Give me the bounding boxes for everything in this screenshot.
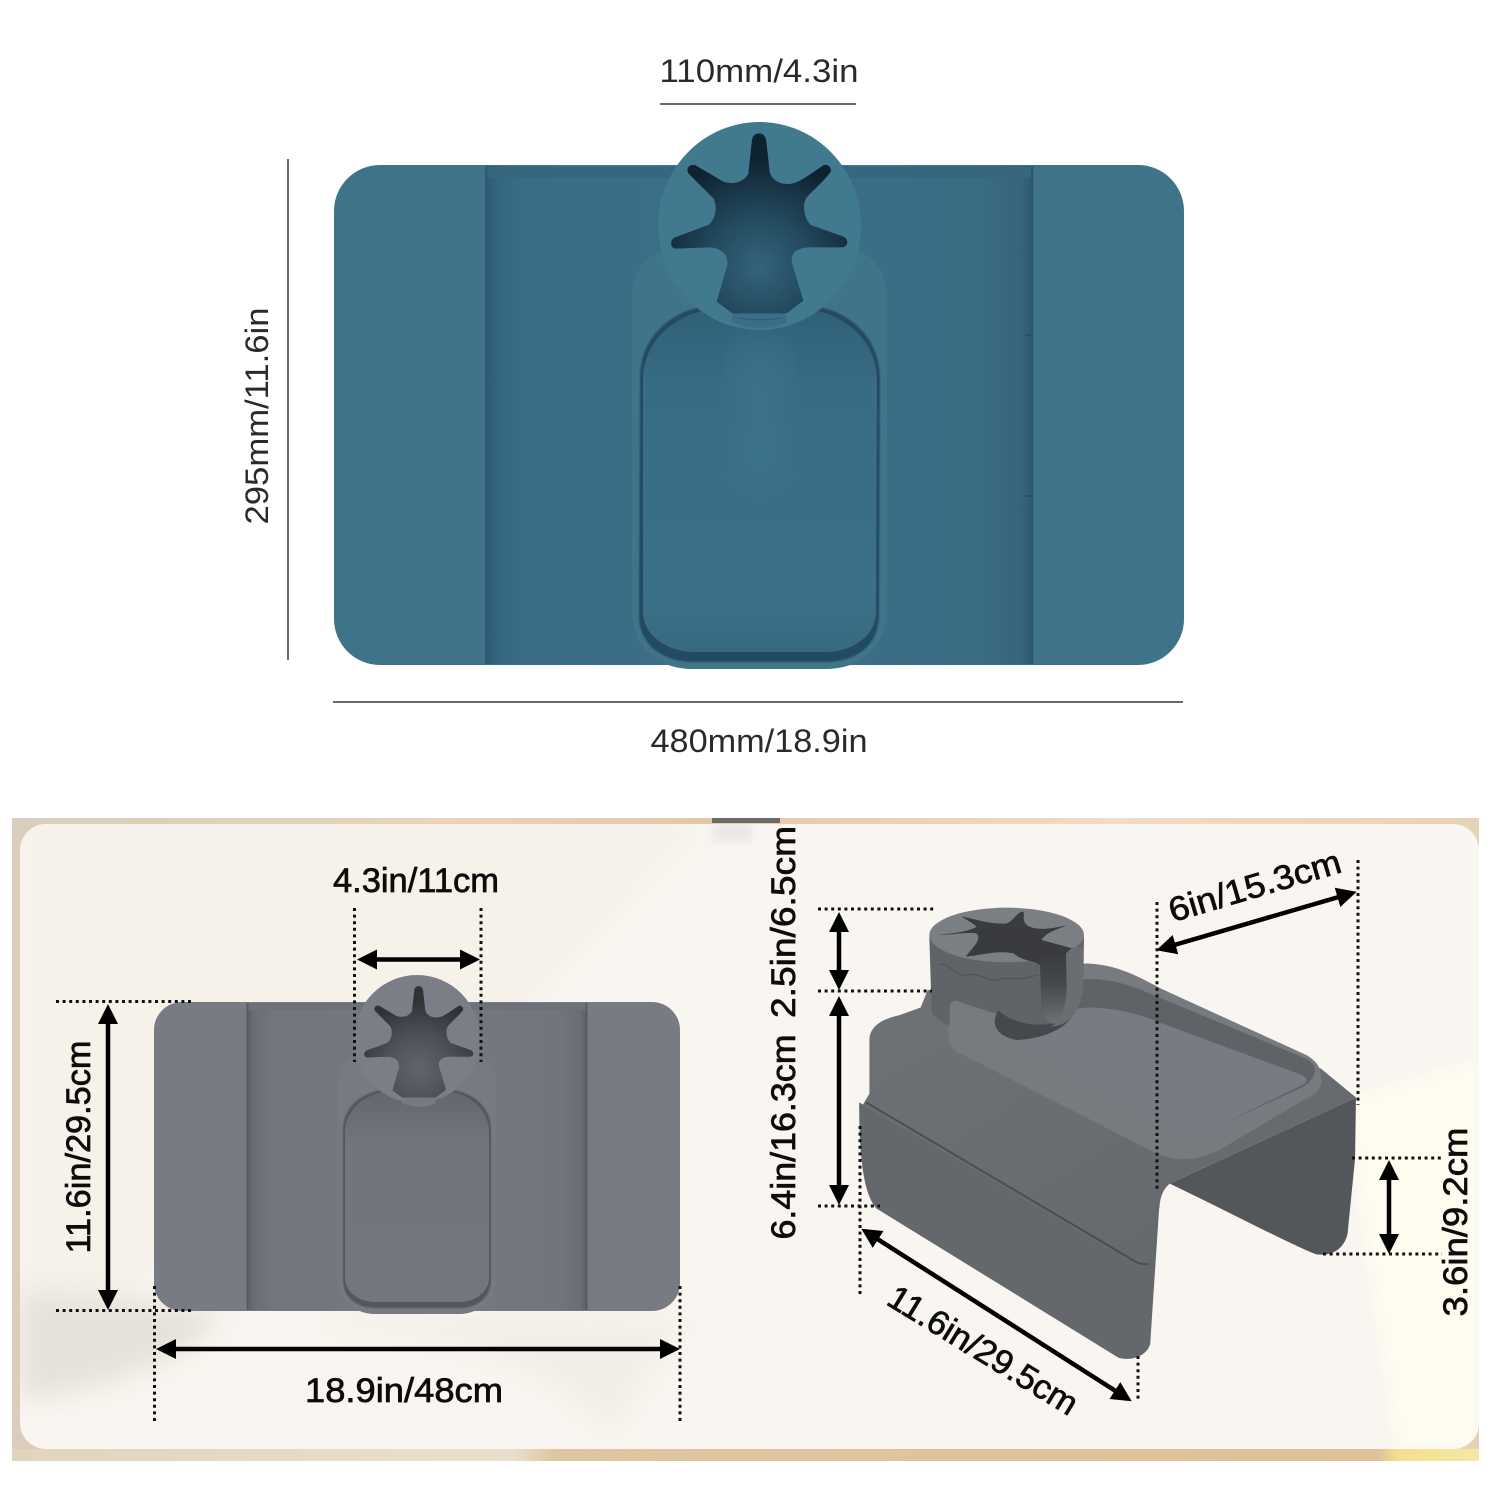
slot interior — [1040, 953, 1068, 1024]
front pocket — [859, 1102, 1159, 1359]
3D view dimension lines — [818, 860, 1442, 1402]
top dimension: total width: 480mm/18.9in — [650, 723, 868, 759]
cylinder wavy seam — [938, 964, 1037, 980]
label: cup holder width: 4.3in/11cm — [333, 862, 499, 900]
grey cup holder — [354, 975, 480, 1107]
arrow: tray width — [1164, 894, 1349, 948]
grey tray well — [343, 1089, 491, 1308]
label: tray height: 6.4in/16.3cm — [765, 1035, 803, 1239]
grey tray, 3D perspective view — [859, 908, 1356, 1359]
teal tray rim — [632, 246, 887, 669]
back leg — [1170, 1097, 1356, 1255]
tray floor — [993, 1008, 1307, 1129]
grey mat base — [154, 1002, 680, 1311]
arrow: cup holder width — [365, 957, 472, 962]
teal armrest tray, top view — [334, 122, 1184, 669]
teal middle section — [485, 166, 1034, 664]
teal tray well — [639, 305, 880, 662]
slot right wall — [1050, 947, 1083, 1027]
hole shadow — [995, 1011, 1073, 1040]
arrow: cup height — [837, 920, 841, 982]
grey tray dimension lines — [56, 908, 680, 1421]
grey tray rim — [338, 1052, 496, 1314]
cylinder top face — [929, 908, 1084, 962]
tray inner wall — [993, 979, 1315, 1129]
cylinder side — [929, 937, 1084, 1040]
label: tray length: 11.6in/29.5cm — [881, 1278, 1085, 1423]
teal mat base — [334, 165, 1184, 665]
teal cup holder — [658, 122, 861, 330]
arrow: leg depth — [1387, 1168, 1391, 1246]
cup star opening — [938, 912, 1072, 1024]
label: mat height: 11.6in/29.5cm — [60, 1040, 98, 1254]
top dimension: width of cup holder: 110mm/4.3in — [660, 53, 858, 89]
cream card — [20, 824, 1479, 1449]
tray tab — [949, 1001, 1063, 1090]
tray outer rim — [949, 964, 1321, 1159]
pocket rim — [866, 1102, 1149, 1264]
label: leg depth: 3.6in/9.2cm — [1437, 1128, 1475, 1316]
arrow: mat height — [106, 1012, 110, 1302]
arrow: tray length — [868, 1233, 1125, 1397]
arrow: tray height — [837, 1004, 841, 1197]
bottom photo panel background — [12, 815, 1479, 1461]
top dimension: height: 295mm/11.6in — [239, 308, 275, 524]
body top and front — [859, 964, 1356, 1275]
arrow: mat width — [164, 1347, 672, 1351]
grey middle section — [246, 1003, 588, 1310]
label: tray width: 6in/15.3cm — [1164, 843, 1346, 930]
label: cup height: 2.5in/6.5cm — [765, 826, 803, 1018]
grey tray, top view — [154, 975, 680, 1314]
label: mat width: 18.9in/48cm — [305, 1372, 503, 1410]
